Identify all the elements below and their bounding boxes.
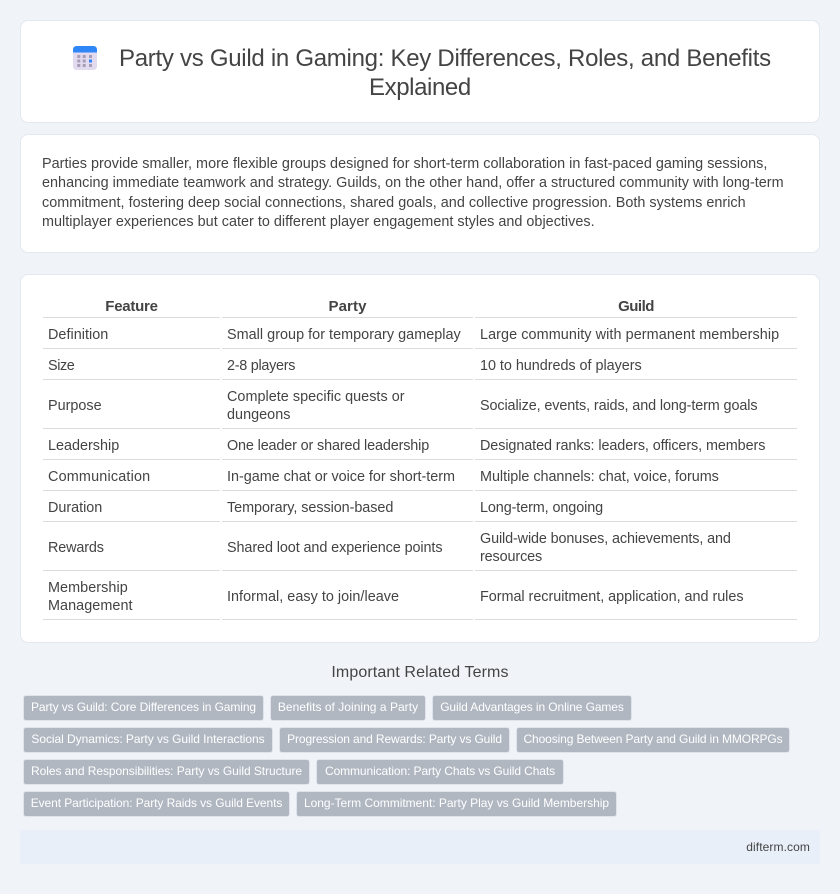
tag list: related terms: Choosing Between Party and Guild in MMORPGs — [524, 732, 782, 746]
panel: comparison table: Guild — [618, 298, 654, 315]
tag list: related terms — [23, 695, 790, 817]
header panel — [20, 20, 820, 123]
panel: comparison table: Party — [328, 298, 367, 315]
title: Explained — [369, 74, 471, 101]
panel: comparison table: Membership — [48, 580, 128, 596]
panel: comparison table: Rewards — [48, 540, 104, 556]
panel: description — [20, 134, 820, 253]
panel: comparison table: Formal recruitment, application, and rules — [480, 589, 743, 605]
title: Party vs Guild in Gaming: Key Differences, Roles, and Benefits — [119, 45, 771, 72]
description text: enhancing immediate teamwork and strategy. Guilds, on the other hand, offer a structured community with long-term — [42, 175, 784, 191]
panel: comparison table: Shared loot and experience points — [227, 540, 442, 556]
panel: comparison table: Communication — [48, 469, 150, 485]
description text: commitment, fostering deep social connections, shared goals, and collective progression. Both systems enrich — [42, 195, 746, 211]
panel: comparison table: Small group for temporary gameplay — [227, 327, 461, 343]
description text — [42, 156, 784, 230]
panel: comparison table: Complete specific quests or — [227, 389, 405, 405]
panel: comparison table: dungeons — [227, 407, 290, 423]
icon: calendar — [73, 46, 97, 70]
panel: comparison table: Large community with permanent membership — [480, 327, 779, 343]
panel: comparison table: Guild-wide bonuses, achievements, and — [480, 531, 731, 547]
tag list: related terms: Progression and Rewards: Party vs Guild — [287, 732, 502, 746]
tag list: related terms: Party vs Guild: Core Differences in Gaming — [31, 700, 256, 714]
heading: related terms: Important Related Terms — [331, 664, 509, 681]
panel: comparison table: Feature — [105, 298, 158, 315]
tag list: related terms: Long-Term Commitment: Party Play vs Guild Membership — [304, 796, 609, 810]
panel: comparison table: One leader or shared leadership — [227, 438, 429, 454]
panel: comparison table: In-game chat or voice for short-term — [227, 469, 455, 485]
tag list: related terms: Event Participation: Party Raids vs Guild Events — [31, 796, 282, 810]
panel: comparison table: Long-term, ongoing — [480, 500, 603, 516]
tag list: related terms: Benefits of Joining a Party — [278, 700, 418, 714]
panel: comparison table: 2-8 players — [227, 358, 295, 374]
panel: comparison table: Informal, easy to join/leave — [227, 589, 399, 605]
panel: comparison table: Multiple channels: chat, voice, forums — [480, 469, 719, 485]
description text: multiplayer experiences but cater to different player engagement styles and objectives. — [42, 214, 595, 230]
panel: comparison table: resources — [480, 549, 542, 565]
tag list: related terms: Social Dynamics: Party vs Guild Interactions — [31, 732, 265, 746]
panel: comparison table: Duration — [48, 500, 102, 516]
footer bar — [20, 830, 820, 864]
panel: comparison table: Temporary, session-based — [227, 500, 393, 516]
panel: comparison table: Definition — [48, 327, 108, 343]
panel: comparison table: Management — [48, 598, 133, 614]
panel: comparison table: Socialize, events, raids, and long-term goals — [480, 398, 757, 414]
panel: comparison table: Designated ranks: leaders, officers, members — [480, 438, 765, 454]
tag list: related terms: Roles and Responsibilities: Party vs Guild Structure — [31, 764, 302, 778]
title — [119, 45, 771, 101]
panel: comparison table — [20, 274, 820, 643]
tag list: related terms: Communication: Party Chats vs Guild Chats — [325, 764, 555, 778]
panel: comparison table: 10 to hundreds of players — [480, 358, 642, 374]
panel: comparison table: Leadership — [48, 438, 119, 454]
description text: Parties provide smaller, more flexible groups designed for short-term collaboration in fast-paced gaming sessions, — [42, 156, 767, 172]
footer bar: difterm.com — [746, 840, 810, 854]
panel: comparison table: Purpose — [48, 398, 102, 414]
panel: comparison table: Size — [48, 358, 74, 374]
tag list: related terms: Guild Advantages in Online Games — [440, 700, 624, 714]
